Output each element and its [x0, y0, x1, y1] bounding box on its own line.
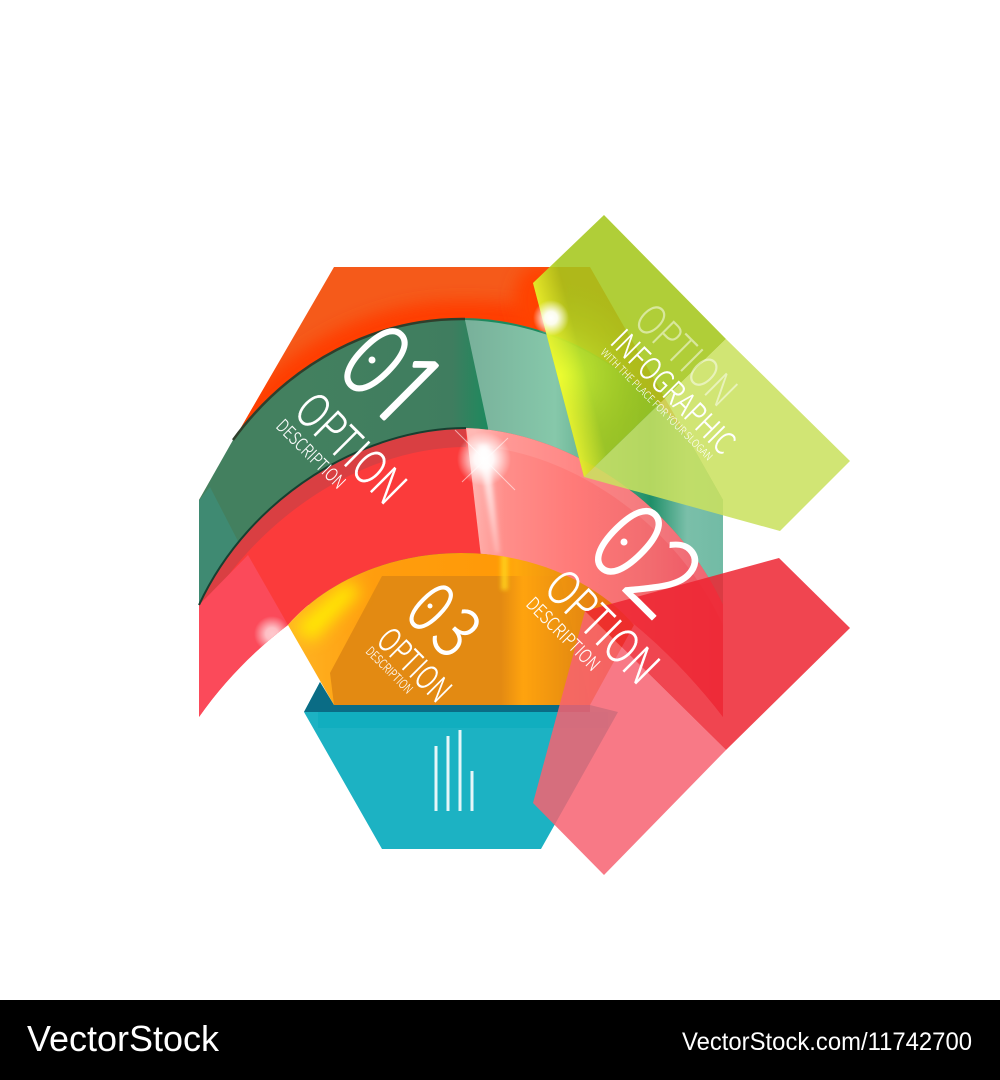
number 03 — [387, 555, 509, 677]
panel: teal lower hexagon — [304, 682, 618, 849]
panel: red fold — [521, 461, 850, 875]
number 02 — [560, 461, 746, 646]
top orange hexagon segment — [199, 264, 723, 500]
label: description 2: DESCRIPTION — [521, 591, 606, 676]
icon: light flare lower — [255, 617, 287, 647]
watermark logo: VectorStock — [27, 1018, 220, 1059]
label: option 2: OPTION — [532, 551, 678, 697]
number 01: 0 — [312, 283, 453, 424]
label: description 3: DESCRIPTION — [362, 641, 418, 697]
label: description 1: DESCRIPTION — [271, 413, 352, 494]
watermark bar — [0, 1000, 1000, 1080]
number 01: 1 — [350, 334, 462, 446]
panel: lime fold — [533, 215, 850, 531]
icon: light flare top — [533, 300, 569, 336]
number 02: 0 — [560, 461, 709, 610]
number 03: 0 — [387, 555, 483, 651]
icon: bars — [434, 730, 474, 811]
panel: red arc band — [199, 420, 735, 720]
label: infographic: INFOGRAPHIC — [603, 318, 748, 463]
panel: green arc band — [199, 318, 723, 605]
watermark url: VectorStock.com/11742700 — [682, 1028, 972, 1056]
number 02: 2 — [597, 497, 746, 646]
label: option 3: OPTION — [368, 615, 464, 711]
panel: orange hexagon — [288, 550, 634, 711]
icon: light flare centre — [455, 430, 515, 490]
label: option lime: OPTION — [623, 288, 753, 418]
panel: central hexagon with arcs — [199, 264, 735, 849]
label: slogan: WITH THE PLACE FOR YOUR SLOGAN — [597, 345, 716, 464]
number 01 — [312, 283, 485, 457]
label: option 1: OPTION — [282, 374, 425, 517]
number 03: 3 — [413, 581, 509, 677]
